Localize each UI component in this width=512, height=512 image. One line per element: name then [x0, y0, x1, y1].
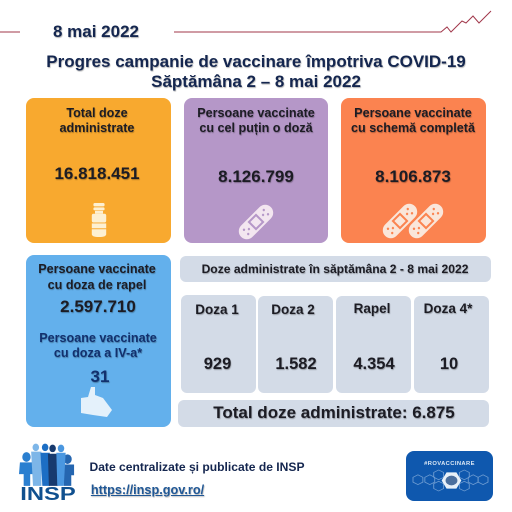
- badge: #ROVACCINARE: [406, 451, 493, 501]
- icon: hexagon network: [412, 470, 488, 492]
- panel: complete schedule: [341, 98, 486, 243]
- source text: Date centralizate și publicate de INSP: [89, 460, 305, 474]
- panel: booster and fourth dose: 31: [91, 366, 109, 386]
- panel: dose 4: Doza 4*: [424, 301, 472, 316]
- logo: INSP: [19, 444, 76, 504]
- header date with rule and trend line: 8 mai 2022: [53, 22, 139, 41]
- panel: at least one dose: [184, 98, 328, 243]
- total weekly doses: [178, 400, 489, 427]
- title: Progres campanie de vaccinare împotriva COVID-19: [46, 52, 466, 71]
- logo: INSP: INSP: [20, 484, 76, 504]
- weekly doses heading: Doze administrate în săptămâna 2 - 8 mai 2022: [202, 262, 468, 276]
- panel: total doses: 16.818.451: [54, 164, 140, 182]
- panel: total doses: [26, 98, 171, 243]
- panel: complete schedule: cu schemă completă: [351, 121, 475, 135]
- panel: booster and fourth dose: cu doza a IV-a*: [54, 346, 142, 360]
- panel: booster and fourth dose: cu doza de rapel: [48, 278, 146, 292]
- panel: booster: [336, 296, 411, 393]
- panel: total doses: administrate: [60, 121, 134, 135]
- title: [46, 52, 466, 92]
- panel: dose 2: [258, 296, 333, 393]
- panel: booster and fourth dose: Persoane vaccinate: [39, 330, 157, 344]
- panel: booster and fourth dose: [26, 255, 171, 427]
- panel: complete schedule: Persoane vaccinate: [354, 106, 472, 120]
- source link: https://insp.gov.ro/: [91, 482, 204, 496]
- panel: at least one dose: 8.126.799: [218, 167, 294, 186]
- panel: dose 1: 929: [204, 355, 231, 373]
- panel: complete schedule: 8.106.873: [375, 167, 451, 186]
- icon: bandage: [238, 204, 274, 240]
- title: Săptămâna 2 – 8 mai 2022: [151, 72, 361, 91]
- panel: dose 4: [414, 296, 489, 393]
- panel: booster: Rapel: [354, 301, 390, 316]
- panel: booster and fourth dose: 2.597.710: [60, 297, 136, 316]
- panel: at least one dose: Persoane vaccinate: [197, 106, 315, 120]
- icon: two bandages: [382, 204, 444, 238]
- icon: vaccine vial: [92, 203, 106, 237]
- header date with rule and trend line: [0, 10, 492, 41]
- panel: at least one dose: cu cel puțin o doză: [199, 121, 313, 135]
- panel: dose 2: 1.582: [275, 355, 317, 373]
- panel: dose 4: 10: [440, 355, 458, 373]
- weekly doses heading: [180, 256, 491, 282]
- panel: total doses: Total doze: [66, 106, 128, 120]
- icon: thumbs up: [81, 387, 112, 417]
- total weekly doses: Total doze administrate: 6.875: [213, 403, 455, 422]
- panel: dose 2: Doza 2: [271, 302, 315, 317]
- panel: booster and fourth dose: Persoane vaccinate: [38, 262, 156, 276]
- badge: #ROVACCINARE: #ROVACCINARE: [424, 460, 475, 466]
- panel: dose 1: [181, 295, 256, 393]
- panel: booster: 4.354: [353, 355, 395, 373]
- panel: dose 1: Doza 1: [195, 302, 239, 317]
